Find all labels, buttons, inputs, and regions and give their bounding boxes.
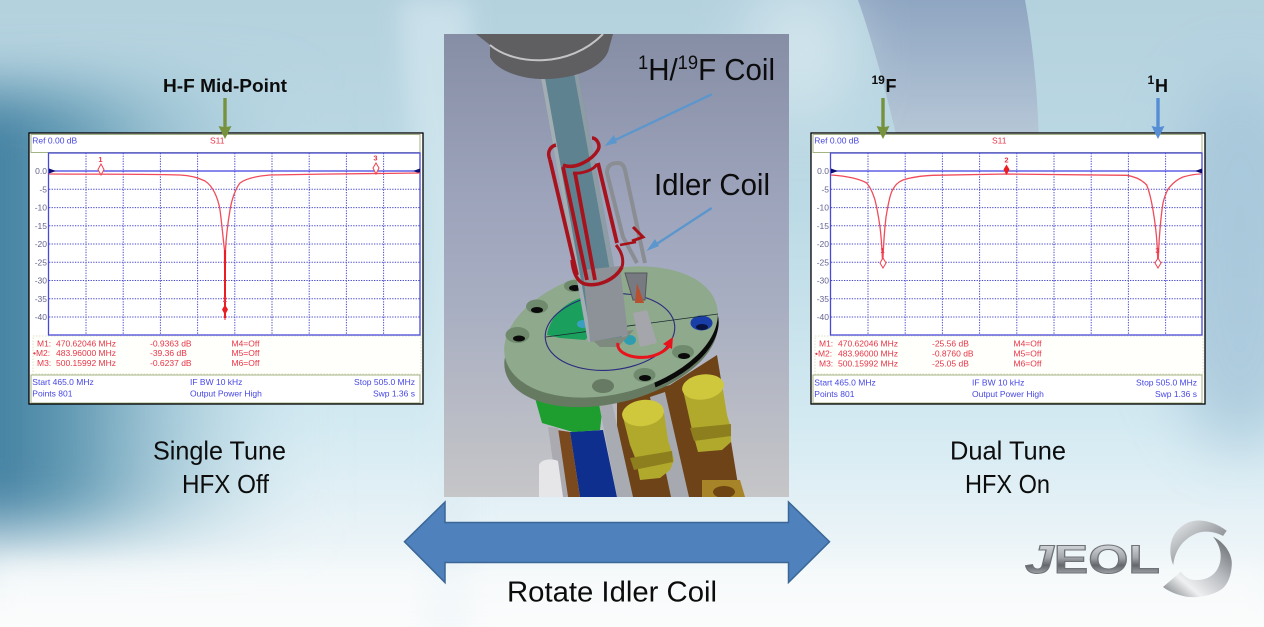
marker readout: -0.8760 dB bbox=[932, 348, 974, 358]
marker readout: -25.05 dB bbox=[932, 358, 969, 368]
heading: H-F Mid-Point: H-F Mid-Point bbox=[163, 76, 287, 96]
status text: Output Power High bbox=[190, 388, 262, 398]
markers on trace bbox=[880, 156, 1161, 268]
status text: Start 465.0 MHz bbox=[814, 377, 876, 387]
axis labels: -5 bbox=[821, 184, 829, 194]
arrow: blue 1H bbox=[1152, 98, 1164, 139]
marker readout: •M2: bbox=[33, 348, 50, 358]
S11 trace bbox=[49, 173, 420, 320]
idler coil bbox=[607, 163, 657, 347]
label: 1H: 1 bbox=[1148, 73, 1154, 87]
status text: Output Power High bbox=[972, 389, 1044, 399]
header text: S11 bbox=[992, 135, 1007, 145]
label: Single Tune HFX Off bbox=[153, 436, 286, 499]
logo ring lower crescent bbox=[1163, 537, 1232, 597]
label: Idler Coil: Idler Coil bbox=[654, 168, 770, 202]
marker readout bbox=[815, 339, 1042, 368]
axis labels: 0.0 bbox=[817, 166, 829, 176]
panel: 3D probe render bbox=[444, 34, 789, 498]
marker readout: M6=Off bbox=[1014, 358, 1042, 368]
axis labels: -20 bbox=[35, 239, 47, 249]
marker readout: -0.9363 dB bbox=[150, 338, 192, 348]
axis labels: 0.0 bbox=[35, 166, 47, 176]
status text bbox=[814, 377, 1197, 399]
status text: Swp 1.36 s bbox=[373, 388, 415, 398]
yellow capacitors bbox=[620, 372, 731, 480]
marker readout: 470.62046 MHz bbox=[56, 338, 116, 348]
markers on trace: 1 bbox=[98, 155, 103, 164]
chart grid bbox=[830, 153, 1202, 335]
markers on trace: 3 bbox=[373, 154, 378, 162]
marker readout: -0.6237 dB bbox=[150, 358, 192, 368]
axis labels: -15 bbox=[817, 221, 829, 231]
marker readout: M3: bbox=[819, 358, 833, 368]
chart grid bbox=[48, 153, 420, 335]
logo ring upper crescent bbox=[1170, 521, 1227, 565]
label: Dual Tune HFX On: Dual Tune bbox=[950, 436, 1066, 466]
marker readout: 483.96000 MHz bbox=[838, 348, 898, 358]
marker readout: 483.96000 MHz bbox=[56, 348, 116, 358]
header text bbox=[32, 135, 225, 145]
label: 19F: 19 bbox=[872, 73, 885, 87]
marker readout: M5=Off bbox=[232, 348, 260, 358]
status text: Points 801 bbox=[814, 389, 855, 399]
arrow: green mid-point bbox=[218, 98, 232, 139]
status text: Stop 505.0 MHz bbox=[1136, 377, 1197, 387]
blue locating circle bbox=[544, 293, 676, 371]
markers on trace: 2 bbox=[223, 295, 227, 304]
header text: Ref 0.00 dB bbox=[32, 135, 78, 145]
marker readout bbox=[33, 338, 260, 368]
axis labels: -30 bbox=[35, 276, 47, 286]
axis labels: -35 bbox=[35, 294, 47, 304]
header text: S11 bbox=[210, 135, 225, 145]
axis labels: -35 bbox=[817, 294, 829, 304]
markers on trace bbox=[98, 154, 379, 315]
axis labels: -25 bbox=[817, 257, 829, 267]
marker readout: M4=Off bbox=[1014, 339, 1042, 349]
sample tube bbox=[541, 72, 628, 342]
status text: IF BW 10 kHz bbox=[190, 377, 242, 387]
markers on trace: 3 bbox=[1155, 246, 1160, 255]
label: Single Tune HFX Off: Single Tune bbox=[153, 436, 286, 466]
axis labels bbox=[817, 166, 829, 322]
label: 19F: F bbox=[886, 76, 896, 96]
S11 trace bbox=[831, 174, 1201, 267]
1H/19F saddle coil bbox=[549, 138, 623, 285]
green window bbox=[547, 297, 590, 340]
label: 1H bbox=[1148, 73, 1168, 96]
arrow: to idler coil bbox=[646, 208, 712, 251]
axis labels: -30 bbox=[817, 276, 829, 286]
plate holes bbox=[506, 280, 712, 382]
marker readout: M3: bbox=[37, 358, 51, 368]
status text: IF BW 10 kHz bbox=[972, 377, 1024, 387]
label: 1H: H bbox=[1155, 76, 1168, 96]
mounting plate bbox=[504, 266, 719, 408]
axis labels bbox=[35, 166, 47, 322]
label: 1H/19F Coil: 1 bbox=[638, 53, 648, 74]
marker readout: -39.36 dB bbox=[150, 348, 187, 358]
label: 1H/19F Coil: H/ bbox=[648, 53, 678, 87]
rotation arrow bbox=[618, 337, 673, 357]
marker readout: M1: bbox=[819, 339, 833, 349]
status text: Start 465.0 MHz bbox=[32, 377, 94, 387]
axis labels: -10 bbox=[817, 203, 829, 213]
plate center mount bbox=[590, 330, 634, 347]
axis labels: -40 bbox=[35, 312, 47, 322]
label: 1H/19F Coil: F Coil bbox=[698, 53, 775, 87]
marker readout: M6=Off bbox=[232, 358, 260, 368]
axis labels: -25 bbox=[35, 257, 47, 267]
logo: JEOL bbox=[1025, 521, 1232, 597]
status text bbox=[32, 377, 415, 398]
arrow: double-headed rotation arrow bbox=[404, 502, 830, 582]
marker readout: 470.62046 MHz bbox=[838, 339, 898, 349]
reference level markers bbox=[831, 168, 1202, 174]
axis labels: -5 bbox=[39, 184, 47, 194]
logo: JEOL: JEOL bbox=[1025, 538, 1160, 582]
header text bbox=[814, 135, 1007, 145]
label: Dual Tune HFX On: HFX On bbox=[965, 469, 1050, 499]
axis labels: -10 bbox=[35, 203, 47, 213]
probe base column bbox=[535, 355, 745, 498]
panel: single tune analyzer chart bbox=[29, 133, 423, 404]
marker readout: M5=Off bbox=[1014, 348, 1042, 358]
markers on trace: 1 bbox=[880, 246, 885, 255]
marker readout: -25.56 dB bbox=[932, 339, 969, 349]
arrow: to 1H/19F coil bbox=[604, 94, 712, 146]
marker readout: •M2: bbox=[815, 348, 832, 358]
label: Single Tune HFX Off: HFX Off bbox=[182, 469, 270, 499]
marker readout: 500.15992 MHz bbox=[838, 358, 898, 368]
axis labels: -20 bbox=[817, 239, 829, 249]
label: Dual Tune HFX On bbox=[950, 436, 1066, 499]
header text: Ref 0.00 dB bbox=[814, 135, 860, 145]
status text: Stop 505.0 MHz bbox=[354, 377, 415, 387]
panel: dual tune analyzer chart bbox=[811, 133, 1205, 404]
axis labels: -40 bbox=[817, 312, 829, 322]
status text: Swp 1.36 s bbox=[1155, 389, 1197, 399]
markers on trace: 2 bbox=[1004, 156, 1009, 164]
top cap bbox=[476, 34, 613, 79]
axis labels: -15 bbox=[35, 221, 47, 231]
marker readout: M4=Off bbox=[232, 338, 260, 348]
status text: Points 801 bbox=[32, 388, 73, 398]
label: 19F bbox=[872, 73, 896, 96]
label: 1H/19F Coil: 19 bbox=[678, 53, 698, 74]
plate notch bbox=[592, 379, 614, 393]
arrow: green 19F bbox=[876, 98, 890, 139]
marker readout: 500.15992 MHz bbox=[56, 358, 116, 368]
marker readout: M1: bbox=[37, 338, 51, 348]
reference level markers bbox=[49, 168, 420, 174]
label: Rotate Idler Coil: Rotate Idler Coil bbox=[507, 576, 717, 608]
